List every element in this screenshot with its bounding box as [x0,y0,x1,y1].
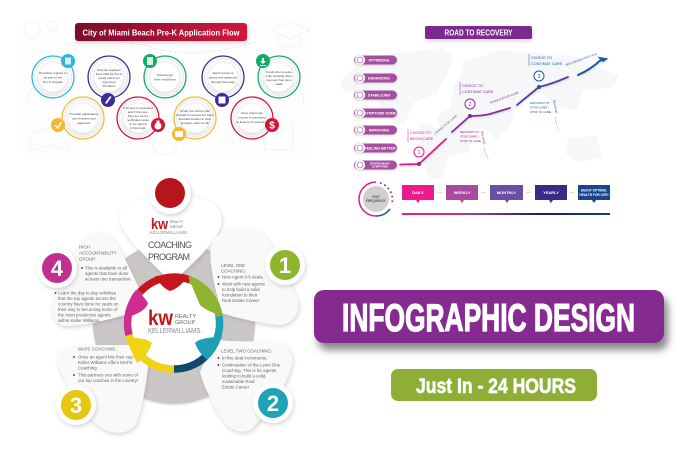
step: invoice raised: through Docusign [211,80,235,84]
top logo [150,216,188,235]
badge 4: 4 [51,256,64,281]
step: invoice contested [117,97,165,139]
step: invoice contested: they are sent a [128,114,149,118]
center logo: GROUP [175,320,196,326]
panel: Pre-K application flow [22,20,310,155]
text: level two: LEVEL TWO COACHING: [221,348,272,354]
choice marker 3: CHOICE TO [531,56,552,60]
text: MAPS coaching: our top coaches in the country! [78,378,138,383]
petal: level two [200,340,292,432]
step: funds: made [275,82,283,86]
text: MAPS coaching: MAPS COACHING: [78,346,117,352]
text: level one: LEVEL ONE [221,263,245,268]
text: level one [218,263,266,303]
step: funds: a file showing when [265,74,293,78]
road labels: STOP CARE / [530,106,549,110]
badge 3: 3 [70,393,82,418]
text: level two: Coaching. This is for agents [222,368,277,373]
text: high accountability: at least one transaction. [85,276,132,282]
text: level one: Real Estate Career [222,298,260,303]
step: invoice contested: to be signed [130,122,147,126]
frequency boxes: WEEKLY [454,190,471,195]
step: parents register: Parents registers [97,68,121,72]
road labels: STOP IN CARE [460,139,481,143]
step: parents register: approved [103,80,116,84]
road labels: RELAPSE [552,99,558,114]
choice marker 1: 1 [417,150,421,156]
text: high accountability: their way to becoming some of [58,307,118,312]
step: invoice raised [202,56,244,107]
step: school plan: program each month [181,121,210,125]
recovery road line [400,58,606,164]
visit frequency dial: VISIT [372,195,380,199]
stage pills: ENHANCING [368,76,390,80]
frequency boxes: YEARLY [543,190,559,195]
choice marker 2: CONTINUE CARE [462,90,494,94]
stage pills [354,55,397,170]
title: Road to Recovery [425,26,532,39]
petal: top [120,190,222,283]
road labels: STOP CARE / [460,134,479,138]
step: funds [256,54,300,98]
road labels [433,52,597,160]
background doodles [22,20,310,155]
step: providers register: Pre-K program [43,80,64,84]
frequency boxes: HEALTH FOR LIFE! [579,193,609,197]
text: level one: foundation to their [222,292,258,298]
step: parents get enrollment: their enrollment [154,78,176,82]
badge 2: 2 [267,391,279,416]
badge: Just In - 24 Hours [391,369,597,401]
panel: Road to recovery [340,26,620,216]
step: school plan: Providers invoices for each [176,113,214,117]
text: level two: Estate Career [222,384,250,390]
step: once approved: $ [269,120,275,132]
choice marker 1 [408,129,434,166]
top red badge [149,172,191,214]
text: level two [218,348,281,390]
step: invoice raised: Each invoice is [213,71,234,75]
road labels: WELLNESS/LIFESTYLE [565,52,597,67]
petal: level one [210,229,298,325]
text: level one: New Agent 0-5 deals. [222,274,264,280]
badge: Just In - 24 Hours: Just In - 24 HOURS [416,375,576,398]
step: parents register: Providers [102,84,116,88]
choice marker 1: CHOICE TO [410,131,431,135]
text: MAPS coaching: Coaching. [78,366,98,370]
text: level one: Work with new agents [222,282,266,286]
text: high accountability [55,244,132,323]
stage pills: IMPROVING [369,128,389,132]
text: level one: to help build a solid [222,287,260,292]
step: invoice contested: in Docusign [130,126,146,130]
step: applications reviewed [51,97,104,139]
step: once approved: to finance for payment. [236,120,268,124]
heading: coaching program: PROGRAM [148,252,190,262]
stage pills: OPTIMIZING [369,58,390,62]
badge 4 [37,248,77,288]
step: parents register [88,56,130,107]
title: City of Miami Beach: City of Miami Beach Pre-K Application Flow [82,28,240,38]
top logo: kw [151,216,168,233]
petal: level four [52,233,147,326]
text: level one: COACHING: [221,268,246,274]
title: Road to Recovery: ROAD TO RECOVERY [444,28,513,38]
step: once approved: invoice is submitted [238,116,266,120]
choice marker 3 [529,54,563,89]
petal: level three [58,345,148,433]
center logo: REALTY [175,314,196,320]
visit frequency dial [359,182,392,216]
text: high accountability: the most productive agents [58,312,112,318]
road labels: STABILIZATION CARE [489,91,519,105]
text: MAPS coaching: This partners you with some of [78,372,139,378]
text: high accountability: agents that have done [85,271,129,276]
step: parents get enrollment: Parents get [157,73,173,77]
step: providers register: Providers register to [39,71,67,75]
stage pills: FEELING BETTER [365,146,396,150]
visit frequency dial: FREQUENCY [366,199,387,203]
text: high accountability: GROUP: [79,256,96,262]
top logo: GROUP [170,225,184,229]
top logo: REALTY [170,220,184,224]
badge 1: 1 [279,253,291,278]
choice marker 3: 3 [537,74,541,80]
heading: coaching program: COACHING [148,240,192,250]
text: MAPS coaching [73,346,139,383]
step: invoice contested: If invoice is contested [123,106,153,110]
frequency boxes: MONTHLY [497,190,517,195]
road labels: DECISION TO [530,101,550,105]
center logo [148,307,202,335]
step: providers register: be part of the [44,76,62,80]
step: funds: payment has been [266,78,292,82]
stage pills: SEVERE/MANY [370,161,390,165]
world map [340,48,620,180]
stage pills: SYMPTOMS [372,164,388,168]
step: applications reviewed: are reviewed and [72,116,96,120]
step: once approved [231,97,279,139]
text: high accountability: ACCOUNTABILITY [79,250,117,256]
text: high accountability: HIGH [79,244,90,250]
text: MAPS coaching: Once an agent hits their cap [78,354,133,360]
stage pills: SYMPTOMS GONE [364,111,397,115]
step: parents register: their child for Pre-K [96,72,123,76]
text: level two: sustainable Real [222,379,254,384]
gray disc [93,242,255,404]
choice marker 2: CHOICE TO [462,84,483,88]
frequency bar [402,213,610,215]
text: high accountability: within Keller Williams. [58,318,100,323]
text: high accountability: country have done for years on [58,302,119,306]
road labels: DECISION TO [460,130,480,134]
step: applications reviewed: approved. [77,121,91,125]
step: parents get enrollment [143,54,186,98]
step: parents register: (seat) select an [98,76,120,80]
panel: KW coaching program [37,172,305,433]
choice marker 1: BEGIN CARE [410,137,434,141]
step: invoice contested: and if they are, [128,110,148,114]
frequency boxes: DAILY [412,190,424,195]
text: high accountability: This is available to all [85,266,127,270]
step: school plan: enrolled student in their [179,117,211,121]
choice marker 3: CONTINUE CARE [531,62,563,66]
center logo: kw [148,307,174,330]
choice marker 2: 2 [468,102,472,108]
step: school plan [172,97,216,141]
road labels: RELAPSE [480,130,486,145]
badge 3 [56,385,96,425]
choice marker 2 [460,82,494,118]
step: school plan: Under the school plan [180,109,210,113]
step: applications reviewed: Provider applications [70,112,99,116]
top logo: KELLERWILLIAMS. [150,230,188,235]
road labels: STOP IN CARE [530,110,551,114]
center ring [125,276,223,369]
text: high accountability: that the top agents across the [58,296,116,301]
text: level two: In five deal increments. [222,356,267,360]
frequency boxes [402,185,610,203]
stage pills: STABILIZING [368,93,390,97]
text: level two: looking to build a solid, [222,374,266,378]
center logo: KELLERWILLIAMS. [148,328,202,335]
title: City of Miami Beach [75,23,247,41]
badge 2 [253,383,293,423]
text: MAPS coaching: Keller Williams offers MAPS [78,360,133,365]
frequency boxes: ENJOY OPTIMAL [581,188,607,192]
step: providers register [32,54,75,98]
text: level two: Continuation of the Level One [222,362,281,368]
text: high accountability: Learn the day to day activities [58,290,117,296]
step: once approved: Once approved, [241,111,263,115]
badge 1 [265,245,305,285]
road labels: CONNECTION CARE [433,114,458,136]
step: invoice raised: raised and approved [209,76,237,80]
step: funds: Funds then require [266,70,292,74]
step: invoice contested: notification letter [127,118,149,122]
